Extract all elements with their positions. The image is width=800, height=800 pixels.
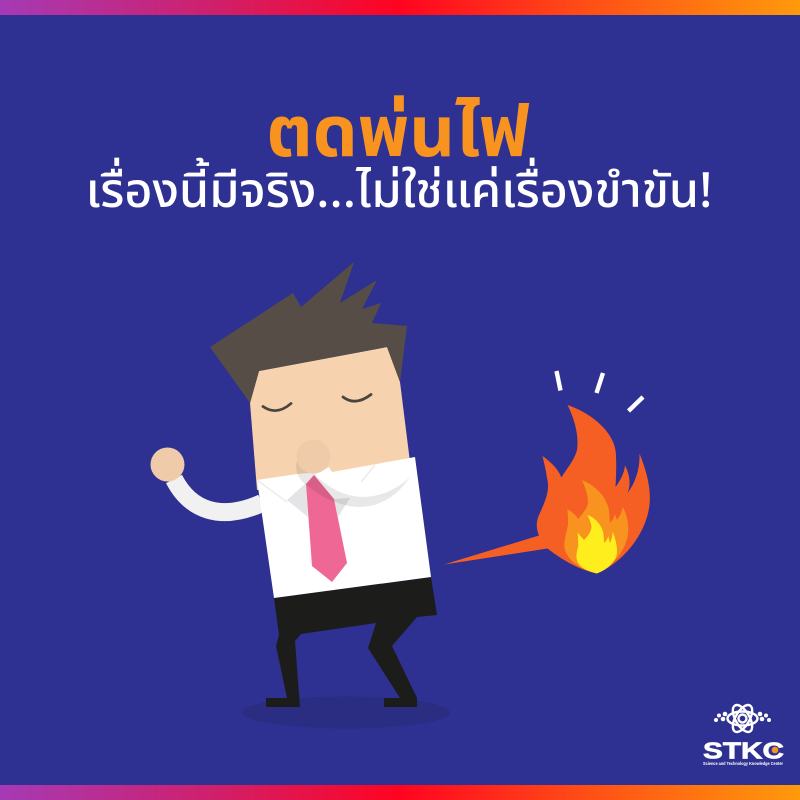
- folded arm shadow: [296, 450, 410, 507]
- top gradient bar: [0, 0, 800, 15]
- raised arm: [174, 479, 262, 512]
- flame jet and outer flame: [444, 405, 650, 574]
- tie: [306, 475, 347, 582]
- middle flame: [564, 480, 628, 573]
- left hand: [150, 448, 184, 482]
- collar shading: [257, 465, 375, 517]
- hair: [210, 262, 407, 403]
- logo: STKC: [703, 702, 784, 766]
- title: ตดพ่นไฟ: [266, 81, 530, 188]
- sparks above flame: [556, 371, 643, 411]
- trousers and legs: [266, 577, 437, 707]
- subtitle: เรื่องนี้มีจริง...ไม่ใช่แค่เรื่องขำขัน!: [86, 156, 712, 229]
- right hand: [296, 440, 330, 474]
- logo atom icon: [714, 702, 771, 735]
- ground shadow: [242, 696, 450, 728]
- bottom gradient bar: [0, 785, 800, 800]
- inner flame: [576, 515, 617, 574]
- logo wordmark: STKC: [703, 738, 784, 764]
- eyes: [263, 394, 371, 411]
- face: [250, 347, 411, 490]
- shirt: [257, 457, 431, 598]
- logo orange dot: [772, 747, 778, 753]
- logo caption: Science and Technology Knowledge Center: [703, 761, 783, 766]
